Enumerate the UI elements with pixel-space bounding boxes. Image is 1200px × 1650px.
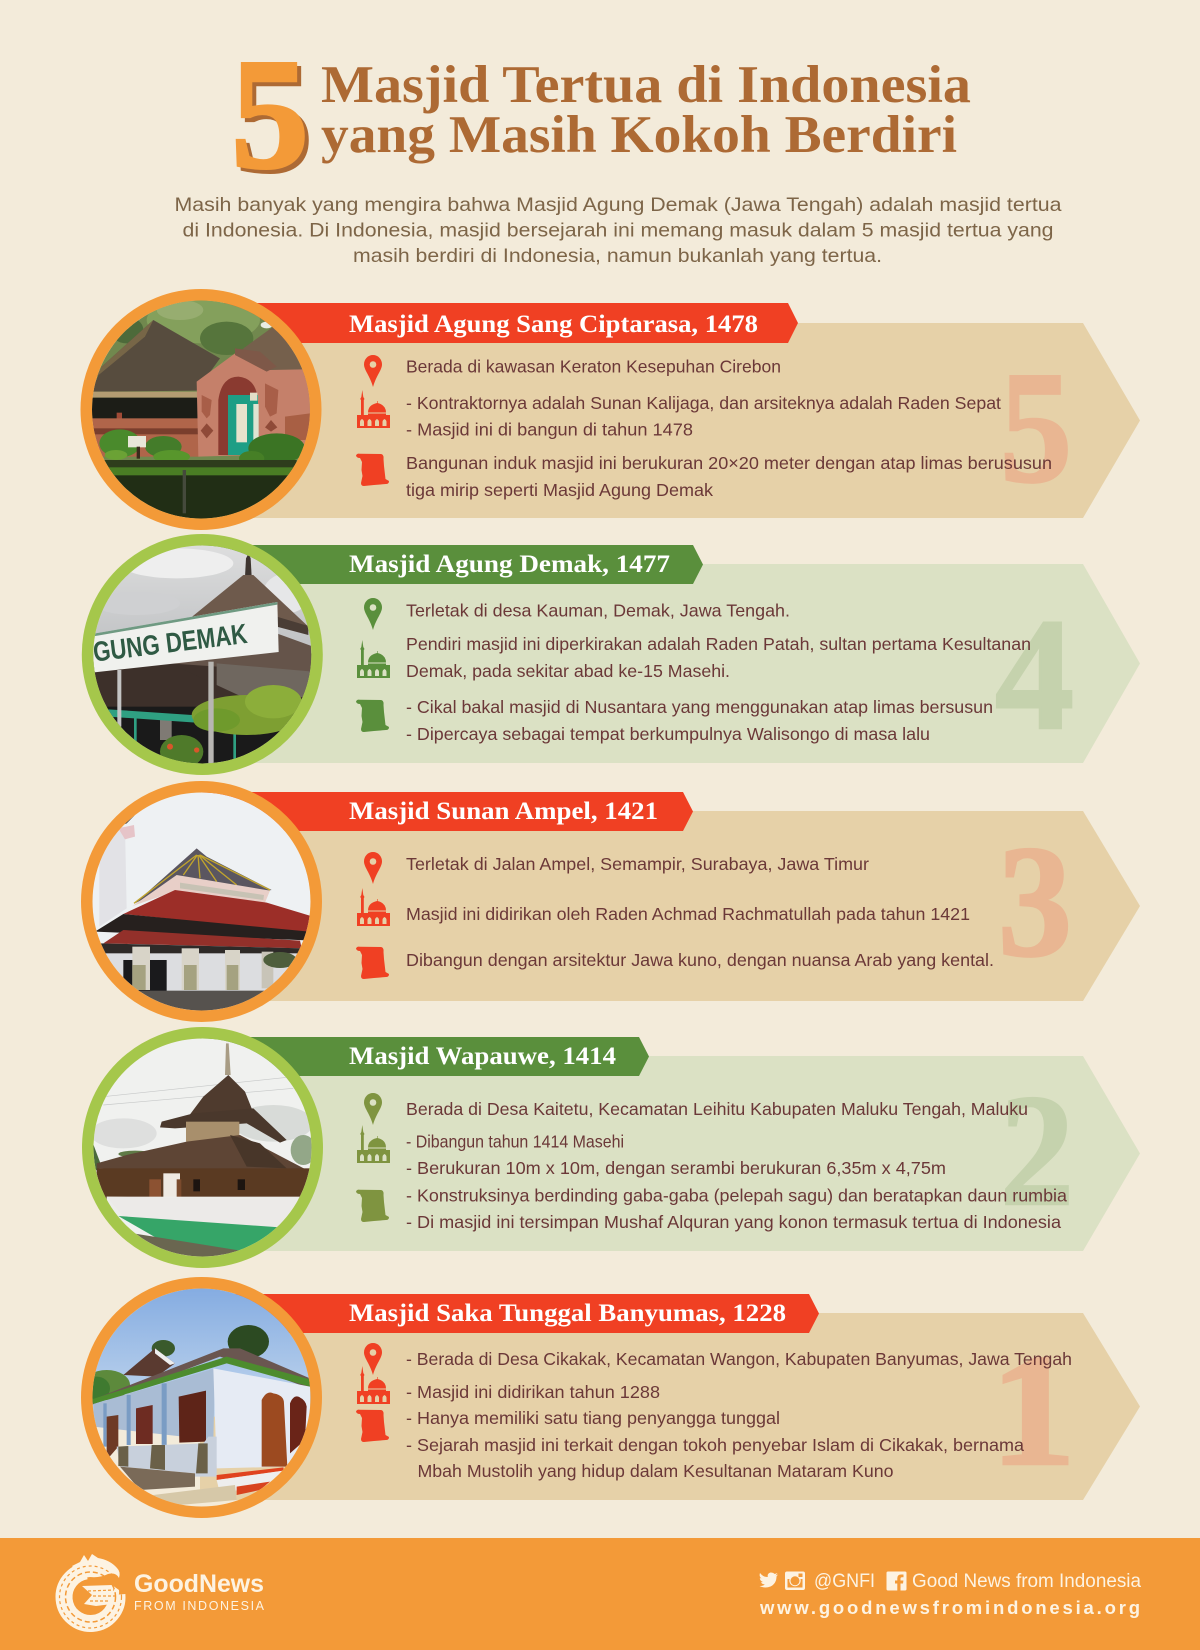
details text: - Berada di Desa Cikakak, Kecamatan Wangon, Kabupaten Banyumas, Jawa Tengah	[406, 1349, 1072, 1369]
big number 5: 5	[231, 27, 309, 202]
details text: Dibangun dengan arsitektur Jawa kuno, dengan nuansa Arab yang kental.	[406, 950, 994, 970]
handle: @GNFI	[814, 1571, 875, 1592]
photo ring	[88, 1033, 317, 1262]
details text: Mbah Mustolih yang hidup dalam Kesultanan Mataram Kuno	[418, 1461, 894, 1481]
details text: - Dibangun tahun 1414 Masehi	[406, 1132, 624, 1152]
icon: scroll	[356, 1190, 389, 1222]
website: www.goodnewsfromindonesia.org	[759, 1597, 1140, 1618]
photo ring	[87, 787, 316, 1016]
title text: Masjid Tertua di Indonesia	[321, 56, 971, 114]
icon: mosque	[357, 390, 390, 428]
title text: yang Masih Kokoh Berdiri	[321, 106, 957, 164]
ribbon heading	[200, 1294, 819, 1333]
details text: Masjid ini didirikan oleh Raden Achmad Rachmatullah pada tahun 1421	[406, 904, 970, 924]
icon: location pin	[364, 852, 382, 884]
ribbon heading: Masjid Agung Sang Ciptarasa, 1478	[349, 311, 758, 338]
ribbon heading	[200, 545, 703, 584]
page name: Good News from Indonesia	[912, 1571, 1141, 1592]
intro paragraph: Masih banyak yang mengira bahwa Masjid Agung Demak (Jawa Tengah) adalah masjid tertua	[174, 194, 1062, 216]
logo	[60, 1554, 265, 1628]
photo ring	[86, 295, 316, 524]
details text: - Kontraktornya adalah Sunan Kalijaga, dan arsiteknya adalah Raden Sepat	[406, 393, 1001, 413]
ribbon heading: Masjid Saka Tunggal Banyumas, 1228	[349, 1300, 786, 1327]
panel: Masjid Saka Tunggal Banyumas	[60, 1277, 1140, 1512]
details text: - Masjid ini di bangun di tahun 1478	[406, 420, 693, 440]
photo: Masjid Agung Demak	[82, 534, 323, 775]
arrow background	[200, 564, 1140, 763]
title	[231, 27, 971, 206]
icon: scroll	[356, 1410, 389, 1442]
icon: mosque	[357, 1366, 390, 1404]
ribbon heading	[200, 1037, 649, 1076]
panel: Masjid Agung Sang Ciptarasa	[70, 280, 1140, 540]
title text	[321, 56, 971, 164]
social links	[759, 1571, 1141, 1618]
rank number: 4	[995, 585, 1074, 763]
icon: scroll	[356, 947, 389, 979]
ribbon heading: Masjid Sunan Ampel, 1421	[349, 798, 658, 825]
details text: - Konstruksinya berdinding gaba-gaba (pelepah sagu) dan beratapkan daun rumbia	[406, 1186, 1067, 1206]
panel: Masjid Agung Demak	[82, 534, 1140, 775]
icon: location pin	[364, 355, 382, 387]
rank number: 2	[1000, 1061, 1074, 1239]
details text	[406, 1099, 1067, 1232]
details text: - Di masjid ini tersimpan Mushaf Alquran yang konon termasuk tertua di Indonesia	[406, 1212, 1061, 1232]
ribbon heading	[200, 792, 693, 831]
arrow background	[200, 811, 1140, 1001]
rank number: 3	[998, 812, 1072, 990]
photo: Masjid Agung Demak: GUNG DEMAK	[91, 618, 249, 668]
arrow background	[200, 1056, 1140, 1251]
panel: Masjid Sunan Ampel	[60, 780, 1140, 1020]
icon: scroll	[356, 454, 389, 486]
details text: Berada di kawasan Keraton Kesepuhan Cirebon	[406, 356, 781, 376]
icon: twitter	[760, 1572, 778, 1588]
photo: Masjid Agung Sang Ciptarasa	[80, 289, 322, 530]
icon: mosque	[357, 1125, 390, 1163]
photo ring	[88, 540, 317, 769]
icon: mosque	[357, 888, 390, 926]
details text	[406, 1349, 1072, 1481]
ribbon heading: Masjid Wapauwe, 1414	[349, 1043, 617, 1070]
details text: - Dipercaya sebagai tempat berkumpulnya Walisongo di masa lalu	[406, 724, 930, 744]
icon: scroll	[356, 700, 389, 732]
details text: - Berukuran 10m x 10m, dengan serambi berukuran 6,35m x 4,75m	[406, 1158, 946, 1178]
icon: location pin	[364, 1343, 382, 1375]
details text: Terletak di Jalan Ampel, Semampir, Surabaya, Jawa Timur	[406, 854, 869, 874]
arrow background	[200, 323, 1140, 518]
intro paragraph: di Indonesia. Di Indonesia, masjid bersejarah ini memang masuk dalam 5 masjid tertua yang	[182, 220, 1054, 242]
details text: - Sejarah masjid ini terkait dengan tokoh penyebar Islam di Cikakak, bernama	[406, 1435, 1024, 1455]
details text: Terletak di desa Kauman, Demak, Jawa Tengah.	[406, 600, 790, 620]
intro paragraph	[174, 194, 1062, 267]
photo: Masjid Sunan Ampel	[60, 780, 327, 1020]
details text	[406, 356, 1052, 500]
icon: location pin	[364, 1093, 382, 1125]
details text	[406, 854, 994, 970]
rank number: 1	[990, 1321, 1076, 1499]
details text: Demak, pada sekitar abad ke-15 Masehi.	[406, 661, 730, 681]
big number 5: 5	[235, 31, 313, 206]
icon: instagram	[785, 1572, 805, 1590]
icon: location pin	[364, 598, 382, 630]
icon: mosque	[357, 640, 390, 678]
ribbon heading	[200, 303, 798, 343]
rank number: 5	[1000, 338, 1072, 516]
photo: Masjid Saka Tunggal Banyumas	[60, 1277, 327, 1512]
arrow background	[200, 1313, 1140, 1500]
footer	[0, 1538, 1200, 1650]
details text: tiga mirip seperti Masjid Agung Demak	[406, 480, 713, 500]
details text	[406, 600, 1031, 744]
logo emblem	[60, 1554, 122, 1628]
details text: - Cikal bakal masjid di Nusantara yang menggunakan atap limas bersusun	[406, 697, 993, 717]
photo ring	[87, 1283, 316, 1512]
ribbon heading: Masjid Agung Demak, 1477	[349, 551, 670, 578]
details text: - Hanya memiliki satu tiang penyangga tunggal	[406, 1408, 780, 1428]
details text: Berada di Desa Kaitetu, Kecamatan Leihitu Kabupaten Maluku Tengah, Maluku	[406, 1099, 1028, 1119]
icon: facebook	[886, 1572, 906, 1590]
logo wordmark: GoodNews	[134, 1570, 264, 1598]
panel: Masjid Wapauwe	[60, 1020, 1140, 1273]
photo: Masjid Wapauwe	[82, 1027, 323, 1268]
logo tagline: FROM INDONESIA	[134, 1599, 265, 1613]
details text: Pendiri masjid ini diperkirakan adalah Raden Patah, sultan pertama Kesultanan	[406, 634, 1031, 654]
intro paragraph: masih berdiri di Indonesia, namun bukanlah yang tertua.	[353, 245, 882, 267]
details text: Bangunan induk masjid ini berukuran 20×20 meter dengan atap limas berususun	[406, 453, 1052, 473]
details text: - Masjid ini didirikan tahun 1288	[406, 1382, 660, 1402]
